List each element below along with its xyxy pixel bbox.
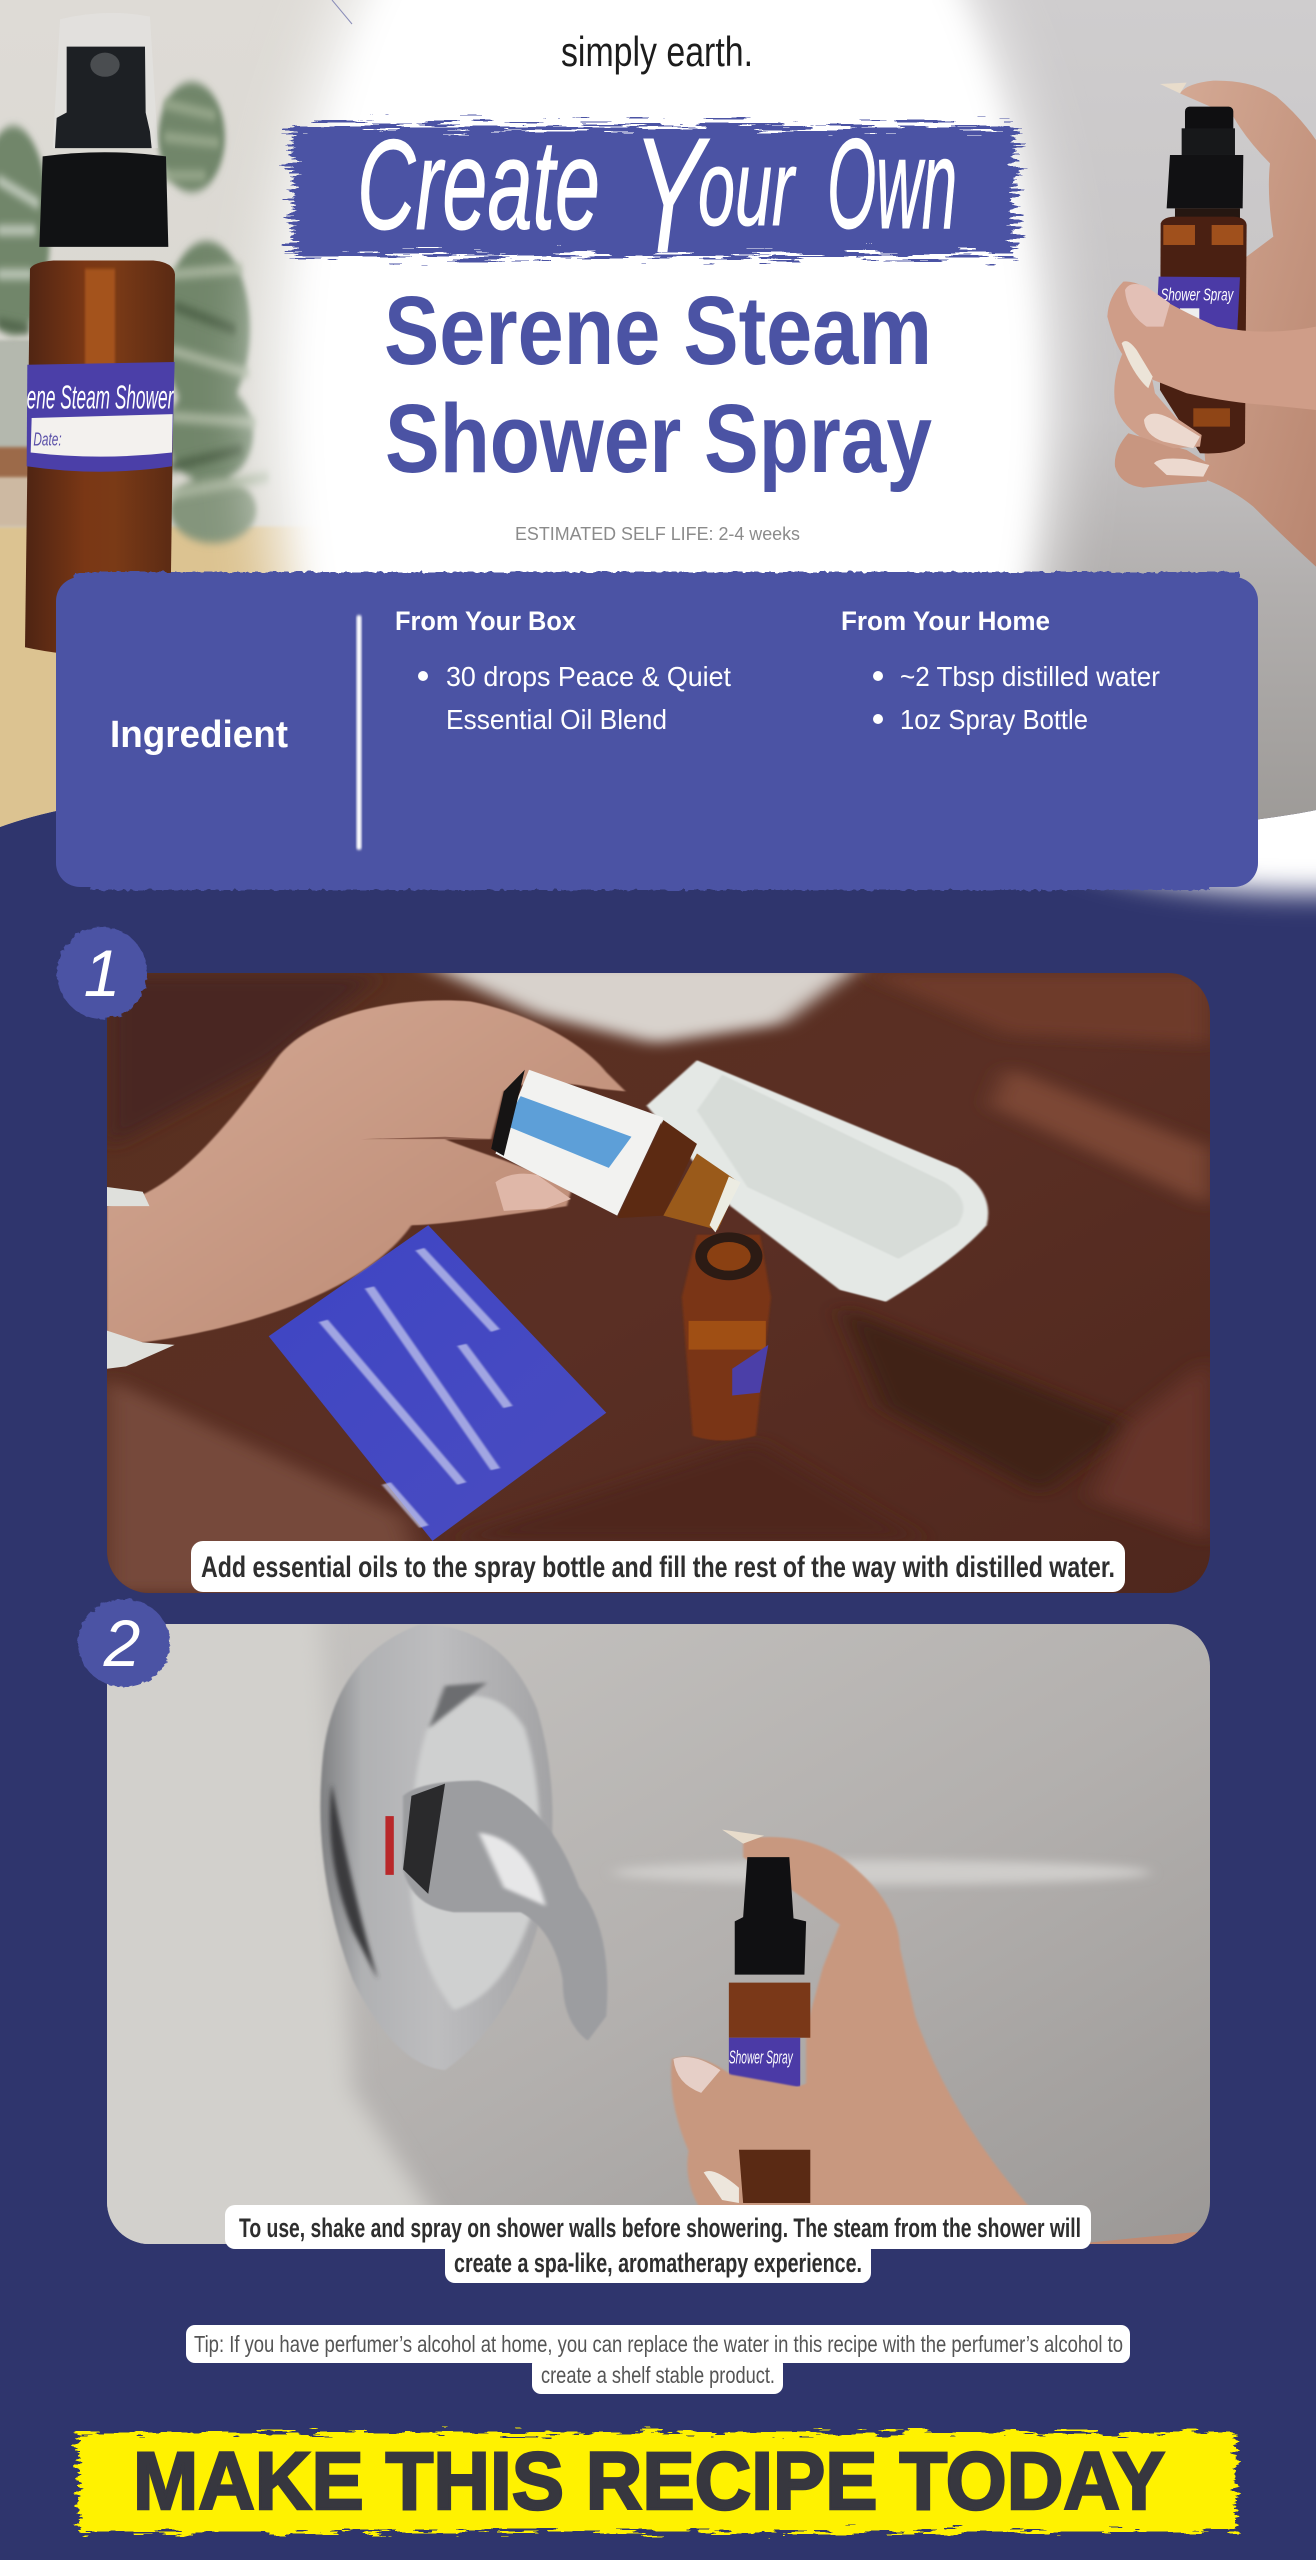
shower valve plate — [320, 1624, 553, 2070]
step 2 caption — [225, 2205, 1091, 2283]
wall highlights — [107, 1624, 435, 2244]
black collar — [39, 152, 168, 247]
instruction card — [269, 1225, 606, 1541]
column: from your box: From Your Box — [395, 606, 576, 636]
large amber bottle, left: ene Steam Shower — [27, 378, 174, 416]
spray bottle: Shower Spray — [729, 2047, 794, 2068]
left scene: table and plant — [0, 82, 353, 878]
step 1 photo — [107, 962, 1210, 1593]
column: from your home: 1oz Spray Bottle — [900, 704, 1088, 735]
step 2 badge — [78, 1599, 170, 1687]
script heading: Y — [632, 103, 711, 287]
watch band — [107, 1187, 175, 1369]
hero photo background — [0, 0, 1316, 827]
open amber bottle — [682, 1235, 771, 1440]
large amber bottle, left — [25, 13, 175, 655]
finger nails — [1125, 284, 1170, 327]
panel background — [56, 577, 1258, 887]
column: from your home: From Your Home — [841, 606, 1050, 636]
fingers in front of bottle — [671, 2057, 1008, 2244]
script heading: our — [698, 127, 796, 248]
tip callout: create a shelf stable product. — [541, 2362, 775, 2388]
table highlight — [420, 962, 865, 1043]
large amber bottle, left: Date: — [33, 430, 62, 450]
main title: Serene Steam — [384, 276, 932, 385]
column: from your box: Essential Oil Blend — [446, 704, 667, 735]
script heading: Create — [357, 114, 600, 257]
hand holding small bottle, right — [1107, 81, 1316, 567]
main title — [384, 276, 932, 493]
ingredient panel — [56, 572, 1258, 890]
white central glow — [220, 0, 1085, 574]
hand — [107, 1000, 626, 1345]
logo: simply earth. — [561, 28, 753, 75]
fingers in front of bottle — [1115, 433, 1213, 488]
step 1 badge — [57, 927, 147, 1019]
small bottle: Shower Spray — [1161, 285, 1234, 305]
call to action banner — [78, 2433, 1236, 2532]
small bottle — [1157, 107, 1247, 454]
white fade under hero, right — [1095, 810, 1316, 916]
column: from your box: 30 drops Peace & Quiet — [446, 661, 731, 692]
hand holding spray bottle — [743, 1837, 1029, 2244]
column: from your home: ~2 Tbsp distilled water — [900, 661, 1160, 692]
call to action text: MAKE THIS RECIPE TODAY — [133, 2436, 1165, 2527]
white soap dish — [647, 1060, 988, 1302]
bottle body — [25, 261, 175, 655]
valve lever — [403, 1781, 607, 2041]
clear cap — [53, 13, 158, 148]
spray bottle — [729, 1857, 810, 2087]
corner hairline at top of glow — [332, 0, 352, 24]
tip callout — [186, 2325, 1130, 2394]
main title: Shower Spray — [385, 384, 932, 493]
amber bottle base between fingers — [739, 2150, 810, 2203]
column: from your home — [841, 606, 1160, 735]
step 2 caption: create a spa-like, aromatherapy experience. — [454, 2248, 862, 2278]
brush stroke — [292, 126, 1016, 256]
script heading — [357, 103, 957, 287]
step 1 caption — [191, 1541, 1125, 1592]
hand shape behind bottle — [1180, 81, 1316, 567]
step 2 photo — [107, 1624, 1210, 2244]
brush banner: create your own: Own — [827, 113, 957, 256]
brush banner: create your own — [292, 103, 1016, 287]
tub edge skin tone — [1075, 2231, 1210, 2244]
step 1 badge: 1 — [84, 936, 120, 1010]
step 2 badge: 2 — [103, 1606, 140, 1680]
vertical divider — [356, 615, 362, 850]
yellow brush stroke — [78, 2433, 1236, 2532]
column: from your box — [395, 606, 731, 735]
panel heading: Ingredient — [110, 714, 288, 756]
black nozzle — [55, 47, 152, 148]
label — [27, 362, 175, 472]
shelf life note: ESTIMATED SELF LIFE: 2-4 weeks — [515, 524, 800, 544]
oil bottle — [491, 1070, 741, 1232]
